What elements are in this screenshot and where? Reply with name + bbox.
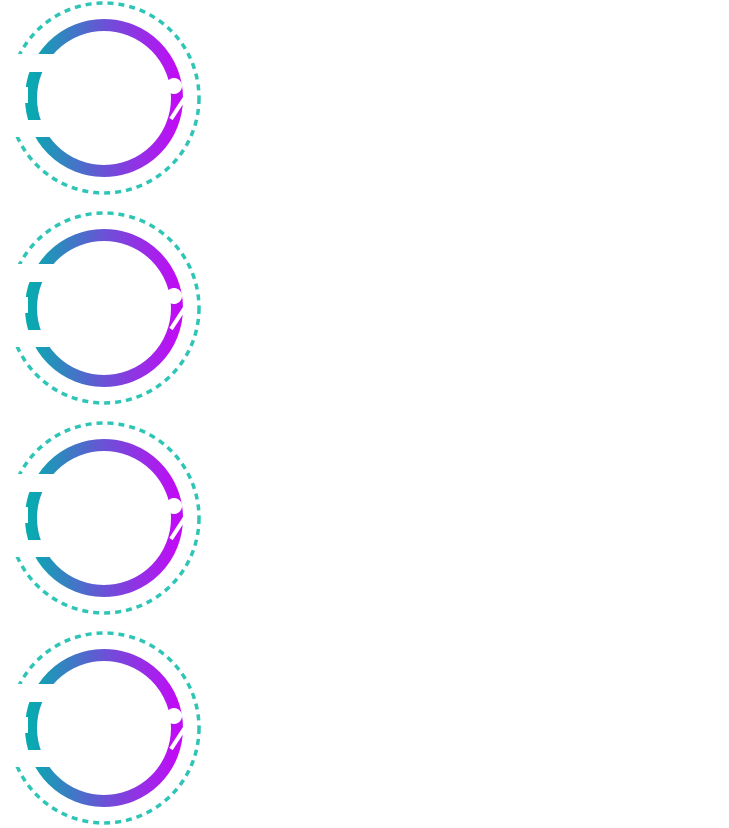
icon: ring 4 <box>2 633 199 823</box>
icon: ring 2 <box>2 213 199 403</box>
icon: ring 1 <box>2 3 199 193</box>
icon: ring 3 <box>2 423 199 613</box>
